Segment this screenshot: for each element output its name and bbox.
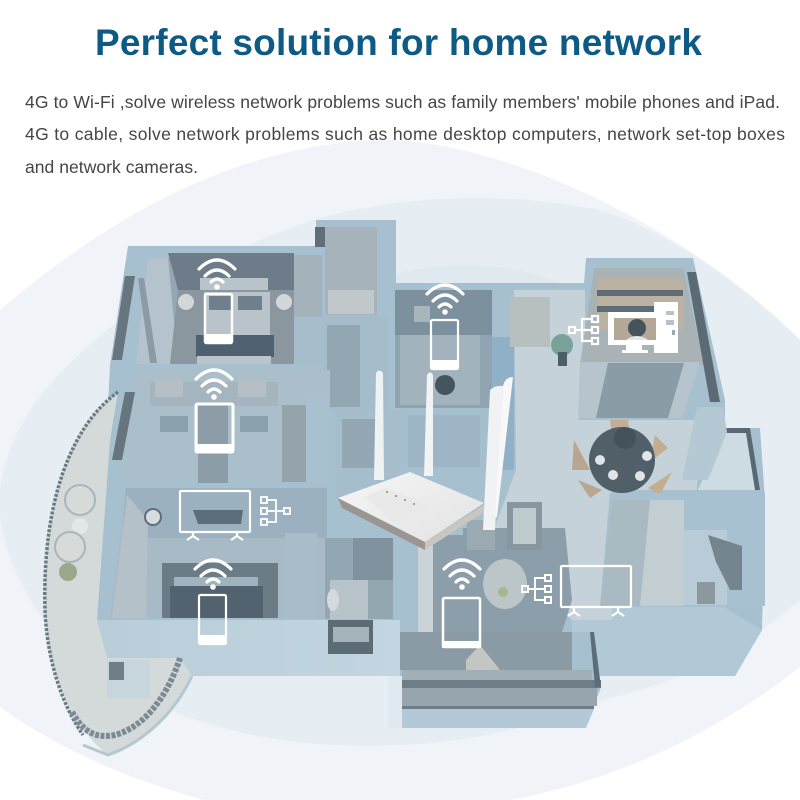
bathroom xyxy=(325,538,393,654)
outer walls top faces xyxy=(97,220,765,728)
background: inner signal shape xyxy=(0,198,800,746)
icon: wifi and tablet, bedroom two xyxy=(195,370,234,453)
dining table xyxy=(572,420,672,498)
living room xyxy=(400,502,572,670)
icon: network, bedroom three xyxy=(261,497,290,525)
pale strip beside south balcony xyxy=(388,676,403,728)
description text: 4G to Wi-Fi ,solve wireless network problems such as family members' mobile phones and iPad. xyxy=(25,92,780,112)
icon: network, living room xyxy=(522,575,551,603)
icon: network, study xyxy=(569,316,598,344)
title: Perfect solution for home network xyxy=(95,22,702,63)
icon: wifi and phone, bedroom one xyxy=(199,260,235,343)
front wall face xyxy=(97,620,400,676)
icon: wifi and tablet, living room xyxy=(442,560,481,648)
right front wall face xyxy=(572,607,762,676)
south east rooms xyxy=(600,493,765,606)
description text: and network cameras. xyxy=(25,157,198,177)
bedroom three xyxy=(110,488,327,618)
right terrace xyxy=(682,407,760,490)
closet xyxy=(315,227,388,410)
study xyxy=(578,268,720,418)
router body xyxy=(338,472,484,550)
icon: tv, living room xyxy=(561,566,631,616)
router back antennas xyxy=(374,370,433,480)
description text: 4G to cable, solve network problems such as home desktop computers, network set-top boxes xyxy=(25,124,785,144)
icon: wifi and phone, center room xyxy=(427,285,463,369)
icon: desktop computer xyxy=(608,302,678,353)
bedroom one xyxy=(112,253,322,364)
router xyxy=(338,370,513,550)
south balcony xyxy=(402,632,601,728)
living dining floor xyxy=(490,290,700,620)
icon: tv, bedroom three xyxy=(180,491,250,540)
hall between rooms xyxy=(336,410,400,500)
floor plan xyxy=(45,220,765,755)
icon: wifi and phone, bedroom three xyxy=(195,560,231,644)
router front antennas xyxy=(483,377,513,530)
bedroom two xyxy=(112,370,330,483)
center room xyxy=(395,290,514,470)
description text xyxy=(25,92,785,177)
background: central signal shape xyxy=(225,265,705,675)
curved balcony xyxy=(45,392,192,755)
